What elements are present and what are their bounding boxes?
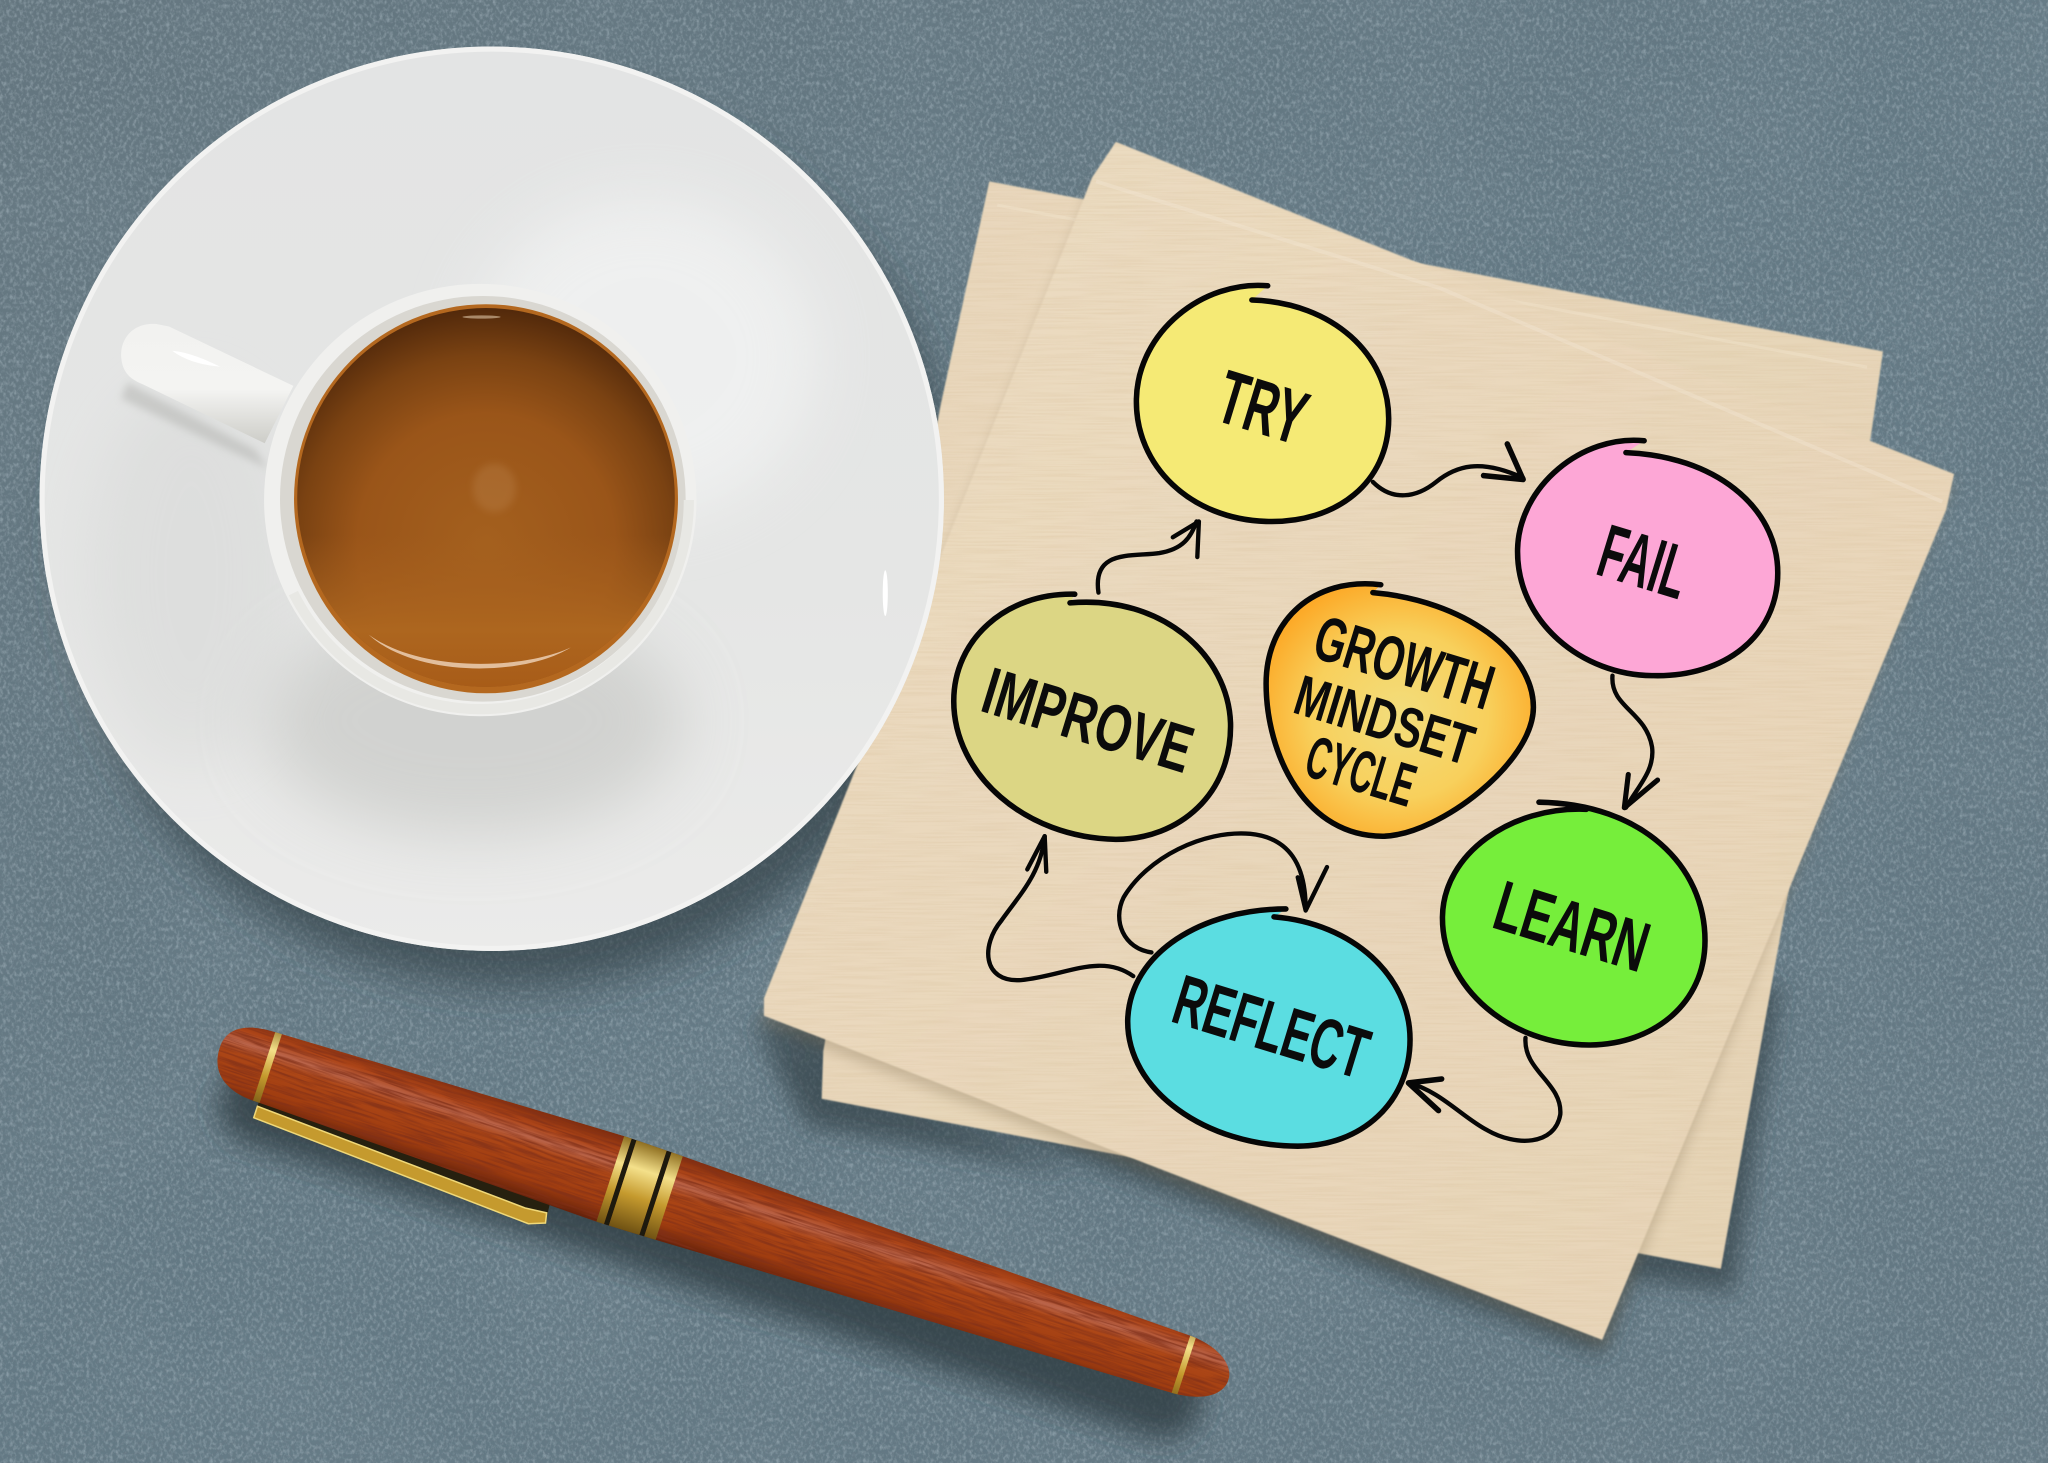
arrow: fail to learn xyxy=(1612,676,1658,808)
saucer xyxy=(40,47,944,951)
bubble: try: TRY xyxy=(1208,355,1317,462)
bubble: improve xyxy=(954,594,1231,839)
shadow: handle on saucer xyxy=(121,383,268,469)
bubble: reflect: REFLECT xyxy=(1164,961,1378,1095)
bubble: growth mindset cycle: GROWTH xyxy=(1306,603,1502,724)
arrow: improve to try xyxy=(1098,521,1199,593)
cup xyxy=(264,284,696,716)
pen xyxy=(217,1028,1230,1397)
bubble: growth mindset cycle: CYCLE xyxy=(1298,723,1423,820)
shadow: napkins xyxy=(752,984,1780,1356)
diagram: growth mindset cycle xyxy=(954,285,1778,1146)
pen clip xyxy=(249,1097,555,1229)
arrow: learn to reflect xyxy=(1408,1038,1560,1141)
bubble: growth mindset cycle: MINDSET xyxy=(1287,663,1482,778)
bubble: improve: IMPROVE xyxy=(974,654,1201,788)
shadow: pen xyxy=(208,1055,1213,1449)
bubble: learn xyxy=(1442,802,1705,1045)
bubble: learn: LEARN xyxy=(1485,867,1658,988)
bubble: reflect xyxy=(1128,909,1410,1146)
cup handle xyxy=(121,324,293,443)
arrow: try to fail xyxy=(1373,444,1523,495)
napkin: front xyxy=(763,141,1955,1340)
coffee xyxy=(294,304,678,693)
bubble: fail: FAIL xyxy=(1589,509,1698,616)
arrow: reflect to improve xyxy=(988,836,1133,980)
bubble: fail xyxy=(1518,440,1778,676)
saucer and coffee cup xyxy=(40,47,944,951)
bubble: growth mindset cycle xyxy=(1266,584,1533,836)
bubble: try xyxy=(1136,285,1389,522)
shadow: front napkin on back napkin xyxy=(760,185,1954,1348)
pen body xyxy=(217,1028,1230,1397)
arrow: reflect loop xyxy=(1119,833,1327,952)
napkin stack with diagram xyxy=(762,141,1955,1343)
napkin: back xyxy=(820,180,1884,1270)
shadow: saucer xyxy=(64,88,960,988)
